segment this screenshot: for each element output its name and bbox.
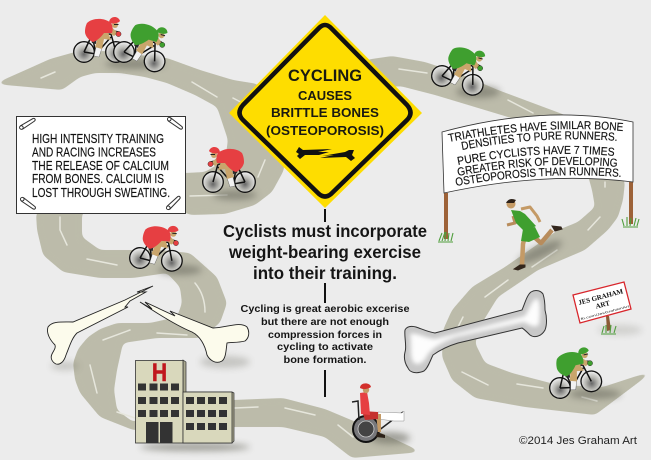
note panel: calcium [16,116,186,214]
grass tufts [438,217,639,242]
note text: HIGH INTENSITY TRAINING [32,131,164,146]
safety pins [19,116,183,211]
runner [506,199,562,270]
banner text: PURE CYCLISTS HAVE 7 TIMES [457,146,614,165]
shadows [51,59,642,451]
wheel [353,416,379,442]
sign diamond [229,15,422,208]
wheelchair rider with leg cast [352,383,404,442]
right winding road [365,56,651,415]
Jes Graham Art sign: JES GRAHAM [577,287,624,307]
rider torso [360,392,370,415]
healthy bone [404,291,546,373]
icon: broken bone on sign [296,147,355,161]
banner cloth [442,115,633,193]
banner text: TRIATHLETES HAVE SIMILAR BONE [448,121,624,142]
cyclist: red, top left [74,17,126,62]
broken bone, left piece [47,286,153,364]
secondary message [240,303,410,366]
broken bone, right piece [140,302,249,362]
secondary message: bone formation. [284,354,367,366]
hospital wings [183,360,234,443]
banner text: OSTEOPOROSIS THAN RUNNERS. [456,167,620,186]
cyclist: red, mid left [129,222,185,272]
secondary message: compression forces in [268,329,382,341]
left winding road [0,51,422,458]
banner text [444,114,624,229]
sign title: CYCLING [288,66,362,85]
cyclist: green, bottom right [543,345,604,400]
main message: Cyclists must incorporate [223,221,427,241]
Jes Graham Art sign: fb.com/JesGrahamArt [580,304,630,321]
Jes Graham Art sign [573,282,631,334]
main message [223,221,427,283]
letter H: H [152,359,167,387]
note text: FROM BONES. CALCIUM IS [32,171,164,186]
banner posts [444,182,633,239]
sign subtitle [266,89,384,138]
banner with posts [438,114,640,242]
sign subtitle: BRITTLE BONES [271,106,379,120]
main message: weight-bearing exercise [228,242,421,262]
hospital windows [138,384,227,443]
caution sign [229,15,422,208]
sign subtitle: CAUSES [298,89,352,103]
secondary message: Cycling is great aerobic excerise [240,303,410,315]
banner text: DENSITIES TO PURE RUNNERS. [461,131,616,150]
secondary message: but there are not enough [261,316,389,328]
rider legs and cast [378,411,404,421]
cyclist: red, facing left below sign [203,147,255,192]
sign border [240,25,410,196]
sign subtitle: (OSTEOPOROSIS) [266,124,384,138]
note text: LOST THROUGH SWEATING. [32,185,170,200]
note text [32,131,170,200]
connector lines [324,209,326,397]
note text: THE RELEASE OF CALCIUM [32,158,169,173]
main message: into their training. [253,263,397,283]
cyclist: green, top left [111,16,175,74]
note text: AND RACING INCREASES [32,144,156,160]
Jes Graham Art sign: ART [595,299,611,311]
banner text: GREATER RISK OF DEVELOPING [458,156,617,176]
copyright: ©2014 Jes Graham Art [519,435,637,447]
hospital [136,359,234,443]
secondary message: cycling to activate [277,341,373,353]
cyclist: green, top right [429,40,492,98]
